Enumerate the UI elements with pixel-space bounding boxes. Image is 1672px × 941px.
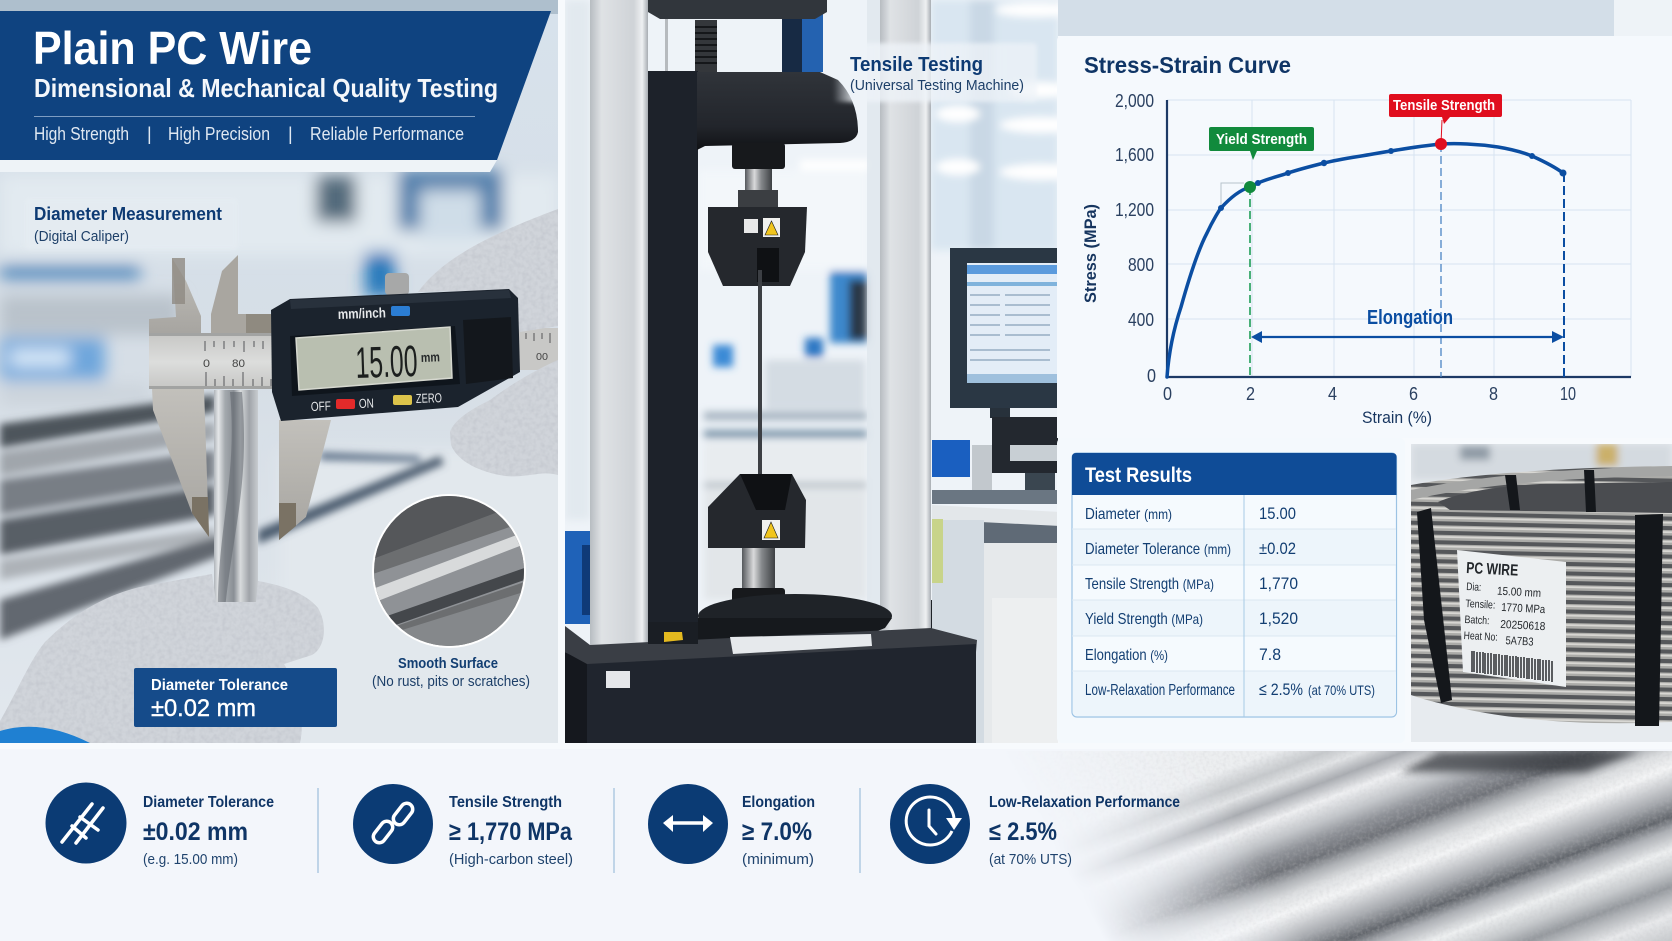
caliper digital body: mm/inch: [338, 304, 386, 322]
coil label: 20250618: [1500, 619, 1546, 633]
x tick labels: 6: [1409, 384, 1418, 404]
stat: low-relaxation performance: ≤ 2.5%: [989, 818, 1057, 846]
callout: diameter tolerance: ±0.02 mm: [151, 695, 256, 722]
upper grip: [708, 143, 807, 286]
tagline: High Strength: [34, 124, 129, 144]
yield strength marker: [1209, 127, 1314, 193]
machine left column: [590, 0, 648, 645]
stress-strain curve: [1167, 144, 1563, 377]
stat: tensile strength: ≥ 1,770 MPa: [449, 818, 573, 846]
row: elongation: [1085, 645, 1281, 664]
y tick labels: 1,200: [1115, 200, 1154, 220]
panel: diameter measurement photo: [0, 0, 570, 750]
stat: elongation: Elongation: [742, 794, 815, 811]
tagline: |: [147, 124, 152, 144]
label: tensile testing: [833, 43, 1037, 102]
coil body: [1411, 466, 1672, 723]
row: low-relaxation performance: ≤ 2.5%: [1259, 680, 1303, 699]
row: low-relaxation performance: Low-Relaxation Performance: [1085, 682, 1235, 699]
machine right column: [867, 0, 931, 630]
row: tensile strength: Tensile Strength (MPa): [1085, 576, 1214, 593]
caliper jaws: 0: [203, 358, 210, 370]
divider: [859, 788, 861, 873]
lower grip: [708, 474, 806, 610]
caliper jaws: [149, 255, 331, 540]
icon: clock: [890, 784, 970, 864]
caliper digital body: [271, 289, 520, 421]
row: diameter: [1085, 504, 1296, 523]
row: diameter tolerance: [1085, 539, 1296, 558]
divider: [317, 788, 319, 873]
grid: [1167, 100, 1631, 377]
yield strength marker: Yield Strength: [1216, 131, 1307, 148]
title banner: [0, 11, 551, 160]
machine top: [648, 0, 827, 72]
x tick labels: 2: [1246, 384, 1255, 404]
panel: tensile testing photo: [565, 0, 1080, 743]
x tick labels: 8: [1489, 384, 1498, 404]
row: tensile strength: 1,770: [1259, 574, 1298, 593]
y tick labels: 400: [1128, 310, 1154, 330]
y tick labels: 800: [1128, 255, 1154, 275]
tagline: Reliable Performance: [310, 124, 464, 144]
y tick labels: 1,600: [1115, 145, 1154, 165]
divider: [613, 788, 615, 873]
top background strip: [1058, 0, 1672, 36]
wire specimen: [758, 270, 762, 495]
stat: low-relaxation performance: [890, 784, 1180, 868]
coil label: 5A7B3: [1505, 635, 1534, 649]
tagline: [34, 124, 464, 144]
row: diameter: 15.00: [1259, 504, 1296, 523]
caliper right beam: 00: [536, 352, 548, 363]
elongation arrow: [1251, 307, 1564, 343]
banner glow: [0, 160, 497, 172]
main title: Plain PC Wire: [33, 22, 312, 74]
stat: elongation: ≥ 7.0%: [742, 818, 812, 846]
caliper digital body: OFF: [311, 398, 331, 414]
label: tensile testing: Tensile Testing: [850, 54, 983, 76]
stat: diameter tolerance: Diameter Tolerance: [143, 794, 274, 811]
y tick labels: 2,000: [1115, 91, 1154, 111]
glove cuff: [0, 727, 90, 743]
stat: diameter tolerance: (e.g. 15.00 mm): [143, 851, 238, 868]
surface caption: (No rust, pits or scratches): [372, 674, 530, 690]
tensile strength marker: Tensile Strength: [1393, 97, 1495, 114]
glove: lower right: [450, 360, 558, 476]
tensile strength marker: [1389, 94, 1502, 150]
barcode: [1472, 651, 1552, 682]
coil label: 1770 MPa: [1501, 602, 1546, 616]
caliper digital body: ZERO: [416, 390, 442, 406]
x axis title: Strain (%): [1362, 408, 1432, 427]
coil straps: [1417, 470, 1663, 726]
surface close-up circle: [370, 494, 530, 650]
panel: test results: [1057, 438, 1405, 743]
panel: bottom summary strip: [0, 749, 1672, 941]
row: elongation: Elongation (%): [1085, 647, 1168, 664]
icon: double arrow: [648, 784, 728, 864]
desk and equipment: [931, 417, 1058, 743]
row: low-relaxation performance: (at 70% UTS): [1308, 682, 1375, 698]
row: diameter: Diameter (mm): [1085, 506, 1172, 523]
y tick labels: 0: [1147, 366, 1156, 386]
caliper digital body: ON: [359, 395, 374, 411]
callout: diameter tolerance: Diameter Tolerance: [151, 677, 288, 694]
row: yield strength: Yield Strength (MPa): [1085, 611, 1203, 628]
coil label: 15.00 mm: [1497, 586, 1541, 600]
coil label: Tensile:: [1465, 598, 1496, 612]
coil label: PC WIRE: [1466, 560, 1519, 580]
stat: low-relaxation performance: (at 70% UTS): [989, 851, 1072, 868]
subtitle: Dimensional & Mechanical Quality Testing: [34, 73, 498, 103]
monitor: [950, 248, 1060, 418]
caliper knob: [385, 273, 409, 295]
stat: tensile strength: Tensile Strength: [449, 794, 562, 811]
stat: diameter tolerance: [46, 782, 274, 868]
row: yield strength: 1,520: [1259, 609, 1298, 628]
glove: lower left: [0, 574, 324, 743]
y tick labels: [1115, 91, 1156, 386]
table header: Test Results: [1085, 464, 1192, 487]
caliper LCD screen: [296, 327, 452, 390]
row: yield strength: [1085, 609, 1298, 628]
surface caption: [372, 656, 530, 690]
chart title: Stress-Strain Curve: [1084, 52, 1291, 78]
x tick labels: 10: [1560, 384, 1576, 404]
x tick labels: 0: [1163, 384, 1172, 404]
label: diameter measurement: [34, 206, 222, 244]
row: diameter tolerance: ±0.02: [1259, 539, 1296, 558]
table header: [1072, 453, 1396, 495]
glove: upper right: [418, 209, 558, 332]
elongation arrow: Elongation: [1367, 307, 1453, 329]
label: diameter measurement: Diameter Measurement: [34, 204, 222, 224]
row: low-relaxation performance: [1085, 680, 1375, 699]
wire rods photo: [1084, 751, 1672, 941]
coil label: Dia:: [1466, 581, 1482, 594]
caliper LCD screen: 15.00: [355, 337, 418, 388]
stat: tensile strength: (High-carbon steel): [449, 851, 573, 868]
callout: diameter tolerance: [134, 668, 337, 727]
stat: tensile strength: [353, 784, 573, 868]
x tick labels: [1163, 384, 1576, 404]
icon: chain link: [353, 784, 433, 864]
x tick labels: 4: [1328, 384, 1337, 404]
yield bracket: [1221, 183, 1244, 208]
coil label: Batch:: [1464, 614, 1490, 627]
row: elongation: 7.8: [1259, 645, 1281, 664]
row: diameter tolerance: Diameter Tolerance (mm): [1085, 541, 1231, 558]
wire rod: [214, 390, 258, 602]
caliper jaws: 80: [232, 358, 245, 370]
crosshead: [697, 72, 858, 150]
table body: [1072, 453, 1396, 717]
caliper right beam: [518, 328, 558, 370]
machine black column: [648, 71, 698, 643]
panel: wire coil photo: [1411, 444, 1672, 742]
machine table: [565, 594, 977, 743]
stat: elongation: [648, 784, 815, 868]
tagline: |: [288, 124, 293, 144]
coil label: Heat No:: [1463, 630, 1498, 644]
icon: caliper: [46, 782, 126, 864]
stat: diameter tolerance: ±0.02 mm: [143, 818, 248, 846]
stat: elongation: (minimum): [742, 851, 814, 868]
label: tensile testing: (Universal Testing Machine): [850, 77, 1024, 94]
dashed guides: [1250, 144, 1564, 377]
tagline: High Precision: [168, 124, 270, 144]
caliper LCD screen: mm: [421, 349, 440, 365]
surface caption: Smooth Surface: [398, 656, 498, 672]
y axis title: Stress (MPa): [1081, 204, 1100, 303]
label: diameter measurement: (Digital Caliper): [34, 228, 129, 245]
row: tensile strength: [1085, 574, 1298, 593]
coil label: [1457, 550, 1566, 687]
panel: stress-strain chart: [1057, 36, 1672, 438]
curve markers: [1218, 148, 1566, 211]
stat: low-relaxation performance: Low-Relaxation Performance: [989, 794, 1180, 811]
axes: [1167, 100, 1631, 377]
